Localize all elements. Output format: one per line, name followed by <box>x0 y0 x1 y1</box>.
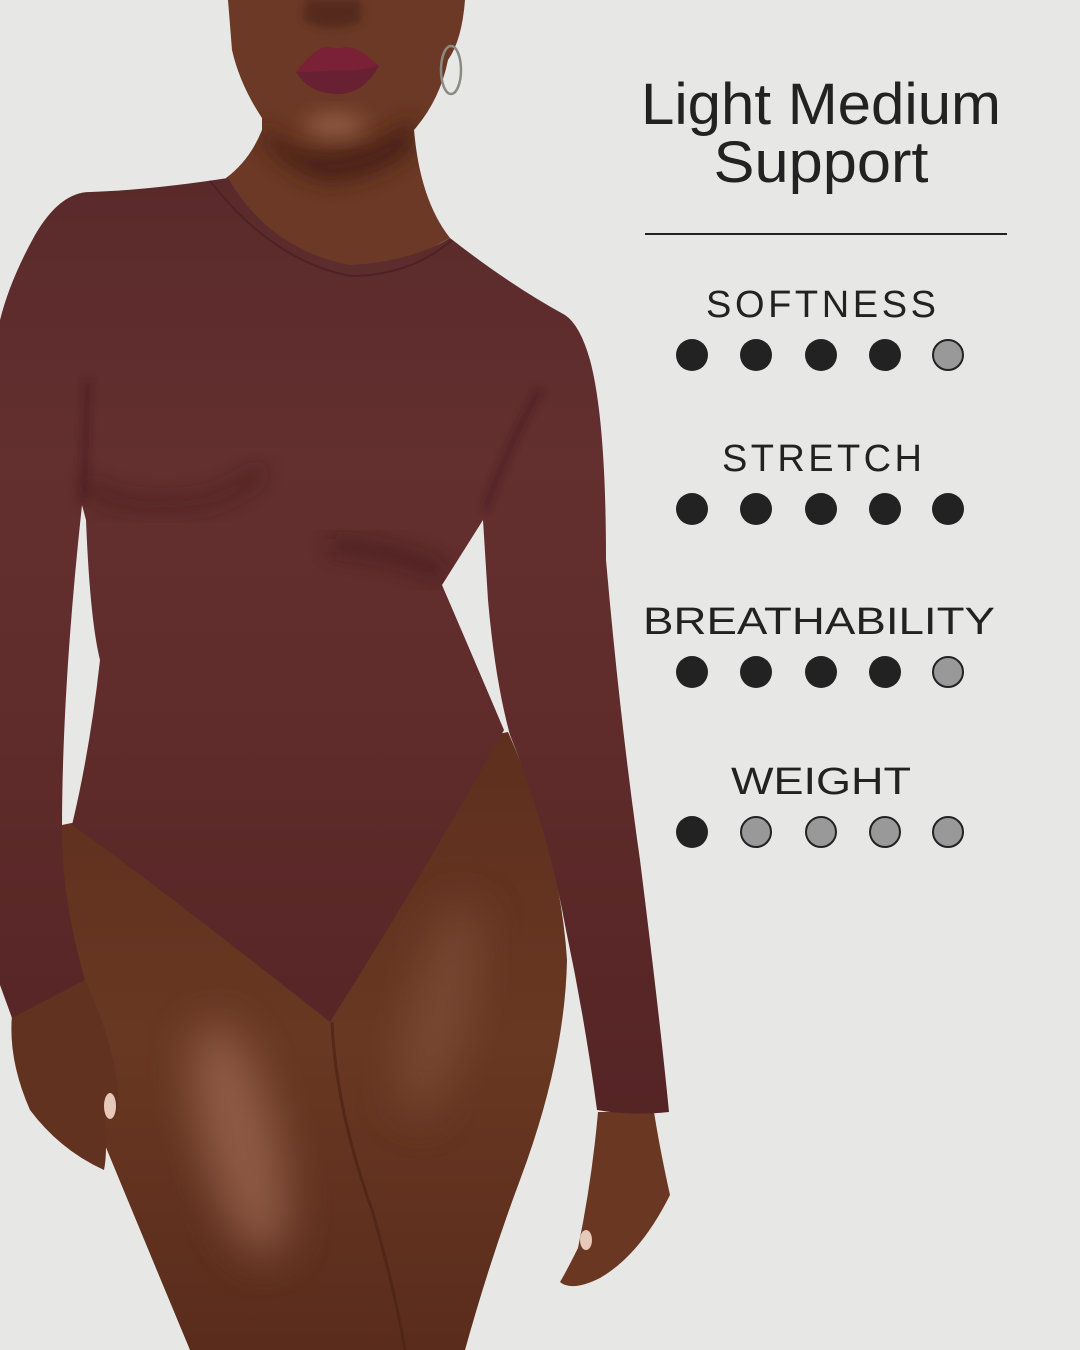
rating: weight <box>676 761 963 848</box>
rating: stretch: STRETCH <box>722 438 922 480</box>
face and neck <box>226 0 465 270</box>
title: Support <box>714 130 928 195</box>
earring <box>441 46 461 94</box>
title: Light Medium <box>641 72 1001 137</box>
figure: model wearing long-sleeve bodysuit <box>0 0 670 1350</box>
lips <box>296 47 379 94</box>
nail <box>580 1230 592 1250</box>
title <box>641 72 1001 195</box>
rating: softness <box>676 284 963 371</box>
right hand <box>560 1112 670 1286</box>
rating: stretch <box>676 438 964 525</box>
rating: breathability <box>643 601 995 688</box>
rating: breathability: BREATHABILITY <box>643 601 995 643</box>
bodysuit <box>0 178 669 1114</box>
rating: softness: SOFTNESS <box>706 284 936 326</box>
divider <box>645 233 1007 235</box>
rating: weight: WEIGHT <box>731 761 911 803</box>
nail <box>104 1093 116 1119</box>
left hand <box>11 980 118 1170</box>
legs <box>61 732 567 1350</box>
